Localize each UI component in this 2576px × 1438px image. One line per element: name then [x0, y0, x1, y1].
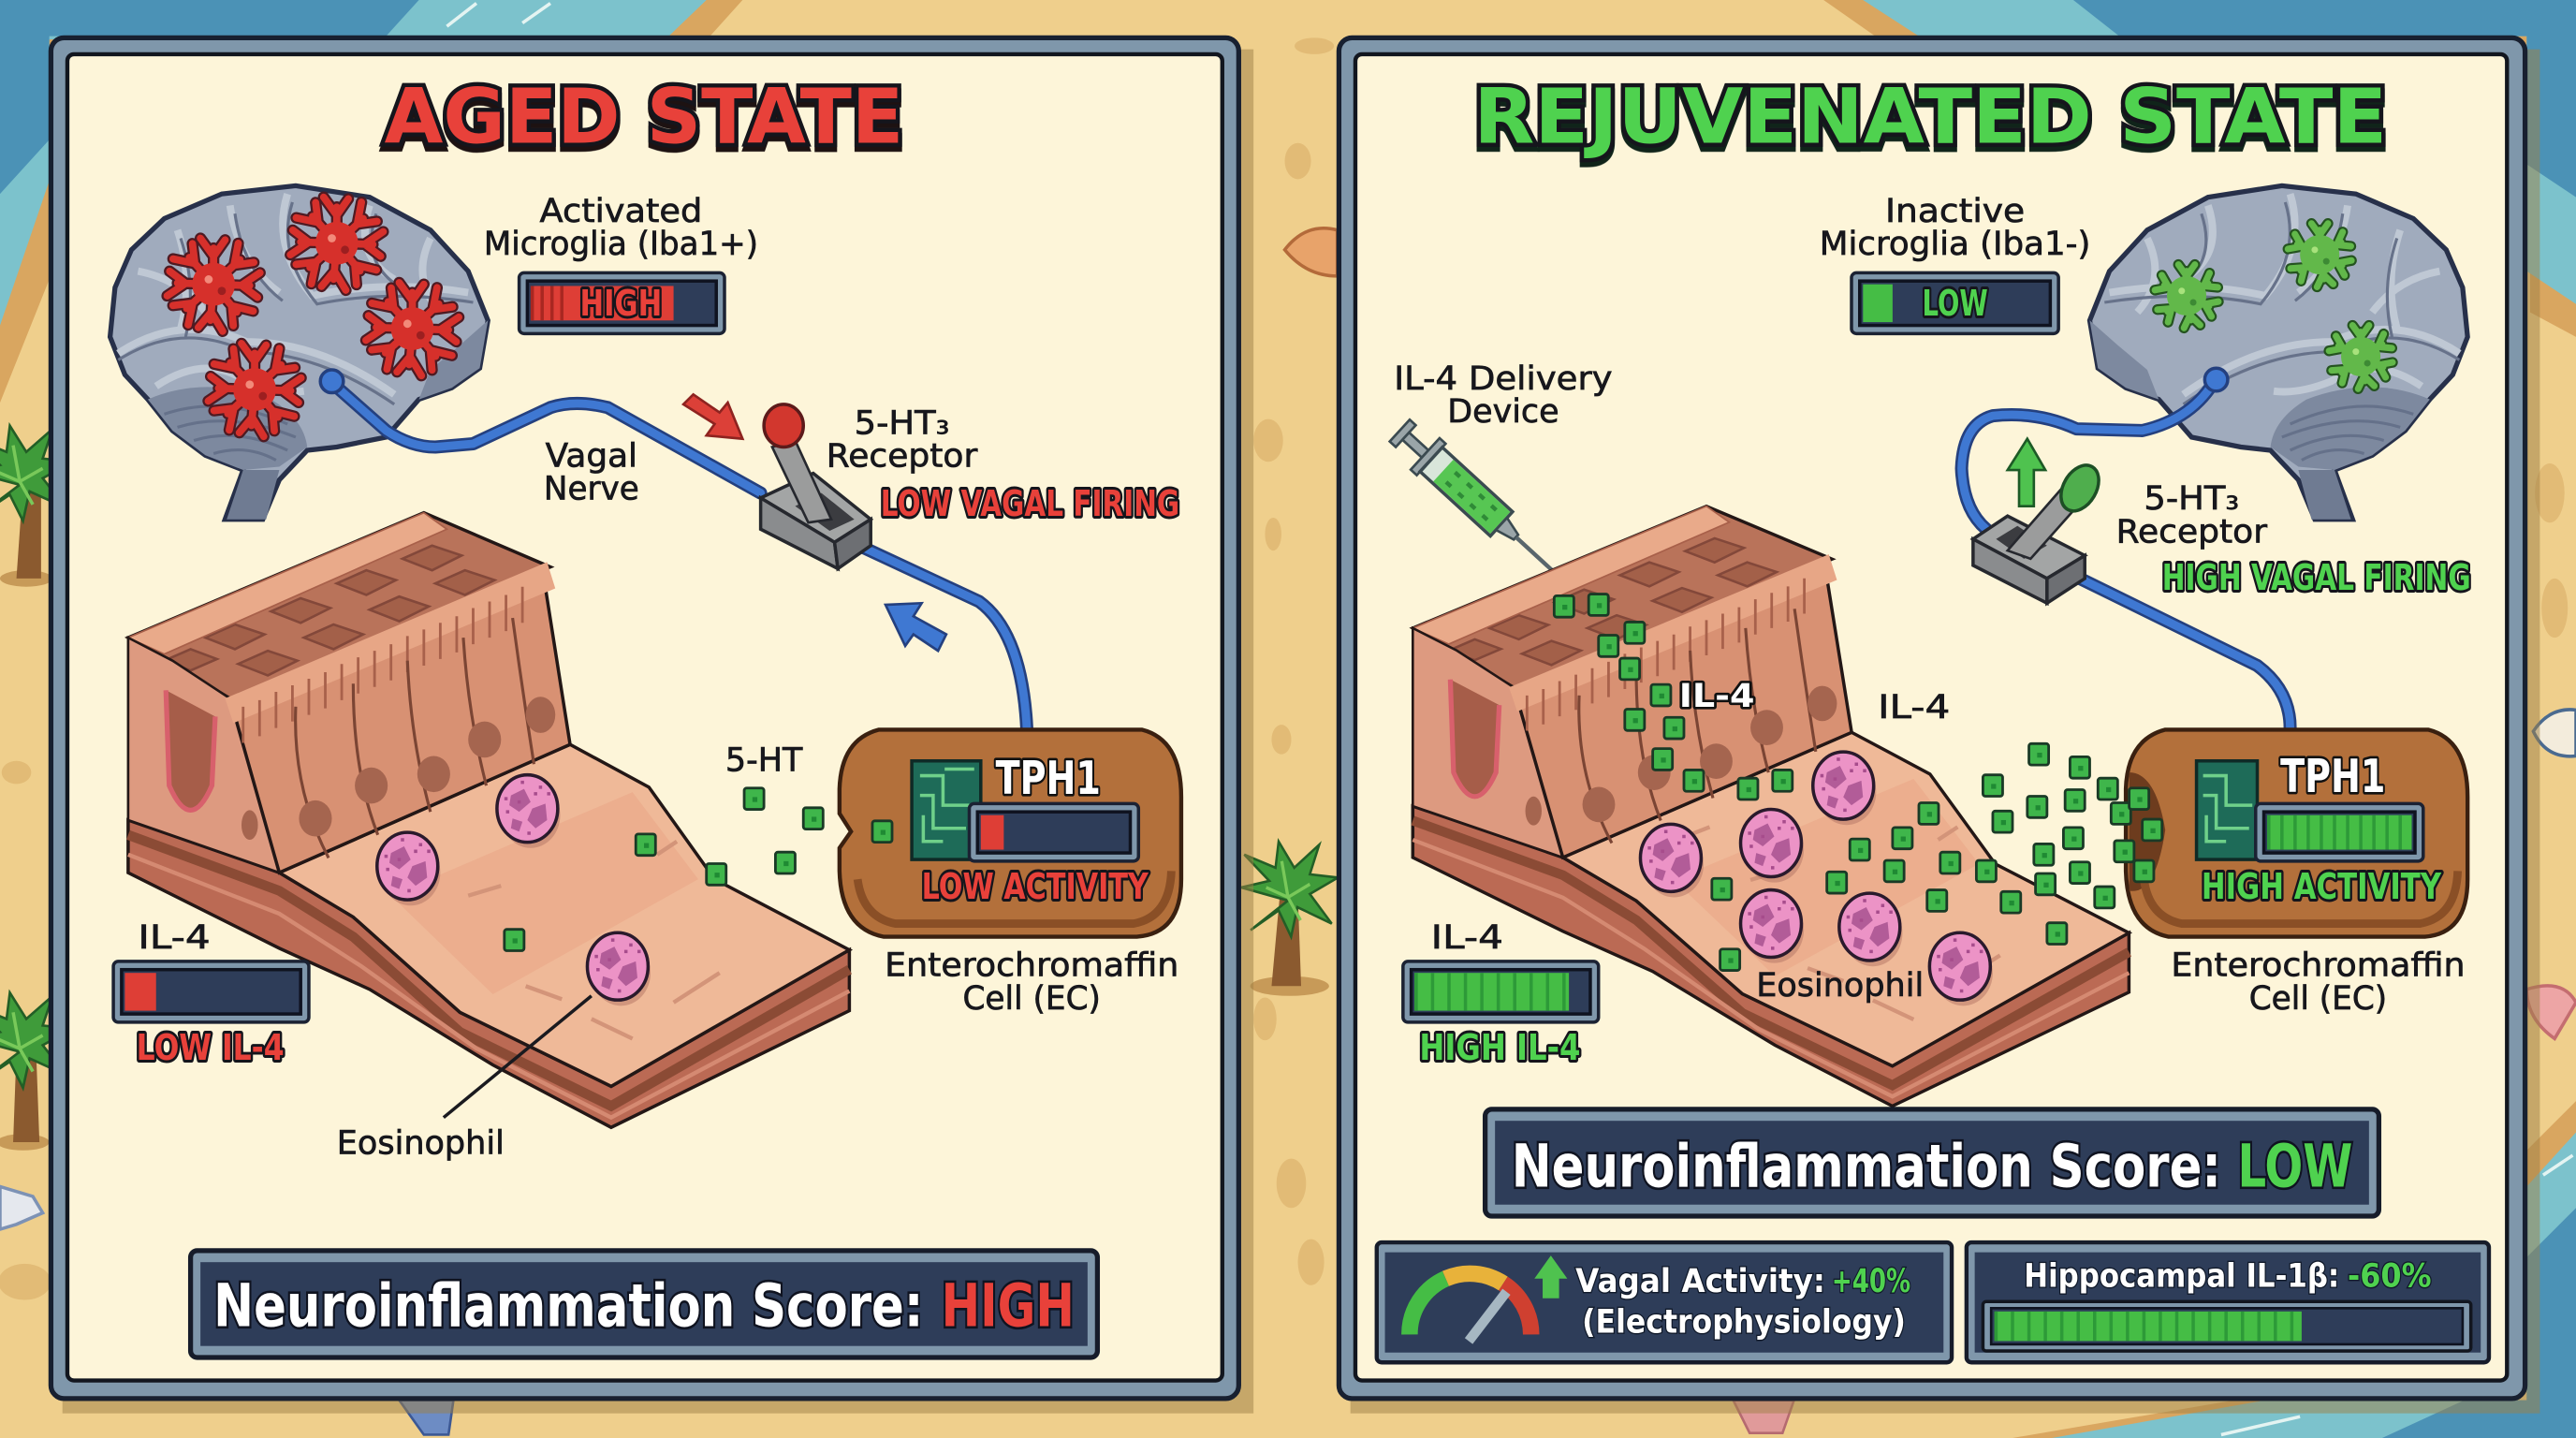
panel: hippocampal IL-1 beta [1967, 1242, 2489, 1362]
callout: neuroinflammation score low [1486, 1109, 2378, 1216]
meter: TPH1 high [2256, 803, 2423, 861]
icon: palm tree left bottom [0, 992, 72, 1151]
icon: pink shell right [2526, 986, 2576, 1038]
meter: microglia low [1852, 272, 2058, 333]
icon: brain with inactive microglia [2089, 185, 2467, 520]
panel: vagal activity [1377, 1242, 1952, 1362]
text: vagal activity: Vagal Activity: [1575, 1262, 1825, 1300]
label: 5-HT: 5-HT [725, 741, 803, 779]
label: vagal nerve: Nerve [544, 470, 639, 508]
label: IL-4 in tissue: IL-4 [1679, 677, 1754, 715]
chart: gut tissue block [128, 513, 849, 1127]
label: enterochromaffin cell: Cell (EC) [962, 979, 1101, 1018]
meter: IL-4 high [1403, 961, 1599, 1022]
arrow: green up [2008, 439, 2045, 506]
arrow: blue up [886, 603, 946, 651]
icon: brain with activated microglia [110, 185, 488, 520]
icon: IL-4 particles [1554, 594, 2162, 971]
icon: pink shell bottom [1734, 1401, 1794, 1433]
label: high vagal firing: HIGH VAGAL FIRING [2162, 557, 2471, 599]
label: TPH1: TPH1 [996, 751, 1101, 805]
text: vagal activity [1575, 1262, 1910, 1342]
meter: IL-1 beta [1983, 1301, 2471, 1351]
icon: circuit chip [912, 761, 981, 859]
icon: gauge [1410, 1273, 1531, 1341]
icon: shell centre [1284, 228, 1338, 276]
label: vagal nerve [544, 437, 639, 508]
text: vagal activity: (Electrophysiology) [1582, 1303, 1906, 1342]
text: vagal activity: +40% [1832, 1262, 1910, 1300]
callout: neuroinflammation score high: Neuroinflammation Score: [213, 1271, 923, 1341]
label: enterochromaffin cell [885, 946, 1178, 1018]
icon: shell right [2533, 710, 2576, 756]
title: rejuvenated state: REJUVENATED STATE [1473, 74, 2387, 162]
label: IL-4 delivery device [1394, 360, 1613, 431]
label: enterochromaffin cell [2171, 946, 2466, 1018]
callout: neuroinflammation score high: HIGH [942, 1271, 1075, 1341]
callout: neuroinflammation score low: Neuroinflammation Score: [1512, 1131, 2221, 1200]
icon: eosinophils [1640, 752, 1993, 1005]
label: activated microglia: Microglia (Iba1+) [484, 225, 758, 263]
label: enterochromaffin cell: Cell (EC) [2249, 979, 2387, 1018]
icon: palm tree left top [0, 426, 72, 587]
label: vagal nerve: Vagal [546, 437, 637, 476]
label: high activity: HIGH ACTIVITY [2202, 866, 2442, 908]
meter: microglia low: LOW [1922, 283, 1988, 325]
label: enterochromaffin cell: Enterochromaffin [885, 946, 1178, 985]
label: IL-4 delivery device: Device [1447, 392, 1559, 431]
nerve: vagal nerve [1962, 368, 2291, 728]
icon: 5-HT particles [505, 788, 823, 951]
text: hippocampal IL-1 beta: -60% [2348, 1256, 2432, 1296]
leader line: eosinophil [444, 996, 592, 1118]
label: enterochromaffin cell: Enterochromaffin [2171, 946, 2466, 985]
icon: white shell left [0, 1186, 43, 1229]
icon: blue shell bottom [399, 1401, 453, 1434]
icon: enterochromaffin cell [2126, 729, 2467, 937]
label: low IL-4: LOW IL-4 [137, 1027, 285, 1069]
label: low vagal firing: LOW VAGAL FIRING [881, 483, 1179, 525]
label: 5-HT3 receptor [827, 404, 978, 476]
label: inactive microglia [1820, 192, 2090, 263]
label: TPH1: TPH1 [2280, 749, 2385, 803]
meter: TPH1 low [970, 803, 1138, 861]
nerve: vagal nerve [320, 370, 1027, 728]
label: activated microglia: Activated [540, 192, 702, 230]
label: activated microglia [484, 192, 758, 263]
label: 5-HT3 receptor: Receptor [827, 437, 978, 476]
arrow: green up [1534, 1255, 1567, 1299]
label: inactive microglia: Microglia (Iba1-) [1820, 225, 2090, 263]
label: IL-4 delivery device: IL-4 Delivery [1394, 360, 1613, 398]
label: low activity: LOW ACTIVITY [922, 866, 1149, 908]
meter: microglia high: HIGH [580, 283, 662, 325]
label: eosinophil: Eosinophil [1756, 966, 1924, 1005]
label: high IL-4: HIGH IL-4 [1419, 1027, 1580, 1069]
label: 5-HT3 receptor: 5-HT₃ [2144, 479, 2239, 518]
label: IL-4: IL-4 [1431, 918, 1503, 957]
label: 5-HT3 receptor: 5-HT₃ [855, 404, 949, 442]
icon: eosinophils [377, 775, 651, 1005]
chart: gut tissue block [1412, 506, 2129, 1106]
label: 5-HT3 receptor [2116, 479, 2268, 550]
label: IL-4: IL-4 [138, 918, 211, 957]
title: aged state: AGED STATE [385, 74, 903, 162]
label: IL-4: IL-4 [1878, 688, 1950, 726]
icon: syringe [1385, 415, 1572, 591]
icon: switch high [1973, 459, 2106, 603]
text: hippocampal IL-1 beta: Hippocampal IL-1β: [2024, 1256, 2339, 1296]
meter: microglia high [520, 272, 724, 333]
panel: aged state [51, 37, 1253, 1414]
icon: palm tree centre [1241, 842, 1338, 996]
icon: switch low [761, 404, 871, 568]
meter: IL-4 low [113, 961, 309, 1022]
icon: enterochromaffin cell [840, 729, 1181, 937]
label: 5-HT3 receptor: Receptor [2116, 512, 2268, 550]
arrow: red down [683, 394, 742, 439]
label: eosinophil: Eosinophil [337, 1123, 505, 1162]
callout: neuroinflammation score high [191, 1251, 1097, 1357]
label: inactive microglia: Inactive [1885, 192, 2025, 230]
icon: circuit chip [2197, 761, 2258, 859]
panel: rejuvenated state [1339, 37, 2539, 1414]
callout: neuroinflammation score low: LOW [2237, 1131, 2352, 1200]
